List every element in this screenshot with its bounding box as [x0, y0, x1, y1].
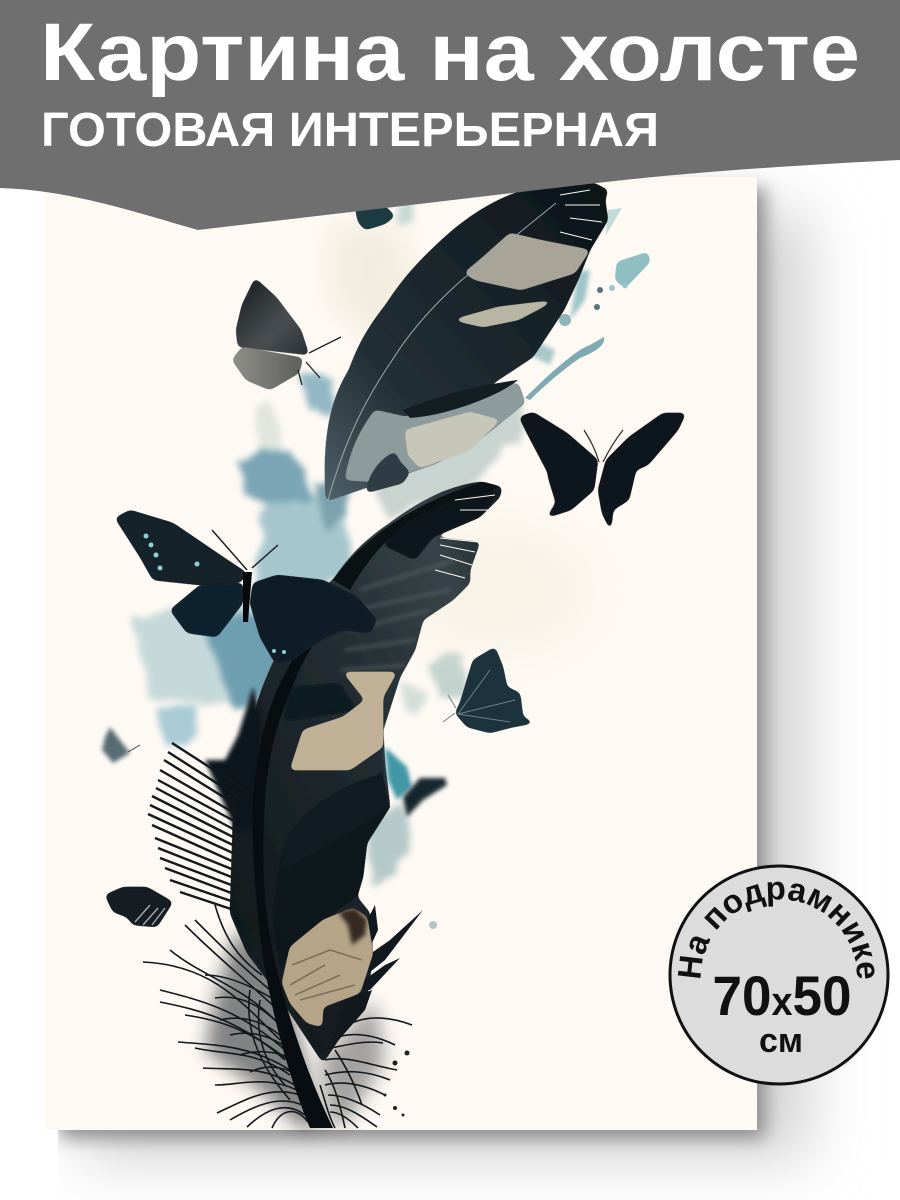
- upper left butterfly lower wing: [232, 347, 303, 390]
- teal butterfly dark wing: [403, 778, 447, 817]
- upper feather: [325, 183, 608, 500]
- tan feather streaks: [290, 950, 362, 1000]
- feather quill: [253, 615, 333, 1128]
- centre butterfly body: [243, 572, 252, 622]
- lower feather tip fringe: [435, 495, 495, 578]
- centre butterfly spots: [144, 534, 286, 654]
- tan feather dark spot: [338, 908, 367, 945]
- lower feather tan patch: [290, 672, 397, 770]
- canvas shadow: [0, 170, 810, 1200]
- centre butterfly antennae: [212, 530, 278, 570]
- butterfly: lower left: [105, 887, 173, 927]
- lower feather tip fill: [383, 490, 500, 560]
- centre butterfly lower left wing: [170, 583, 243, 637]
- upper feather tip fringe: [560, 190, 602, 240]
- badge arc text: На подрамнике: [678, 882, 874, 978]
- upper feather cream wash: [405, 412, 500, 468]
- upper feather light patch lower: [452, 300, 556, 327]
- butterfly: large centre: [115, 510, 377, 663]
- small left butterfly antenna: [128, 745, 140, 752]
- feather down: [143, 905, 412, 1128]
- upper feather shaft: [328, 203, 556, 500]
- upper feather pale base: [345, 383, 525, 482]
- lower left butterfly stripes: [135, 905, 165, 925]
- painting canvas: [45, 177, 757, 1130]
- badge unit: см: [759, 1022, 803, 1060]
- tan feather: [282, 908, 373, 1027]
- butterfly: upper left: [232, 278, 341, 390]
- lower feather overlay top: [283, 773, 390, 870]
- butterfly: top small: [355, 206, 395, 230]
- upper left butterfly top wing: [236, 278, 309, 355]
- right spikes: [330, 905, 423, 1050]
- badge size: 70x50: [712, 964, 852, 1027]
- left vane spike: [205, 687, 262, 830]
- title: Картина на холсте: [40, 7, 860, 98]
- upper feather dark streak: [403, 380, 518, 418]
- centre butterfly upper left wing: [115, 510, 247, 585]
- right-of-feather butterfly veins: [443, 670, 515, 722]
- lower feather dark band: [283, 683, 357, 722]
- lower feather: [205, 482, 502, 1063]
- right butterfly antenna: [584, 430, 623, 462]
- header banner: [0, 0, 900, 230]
- feather down dark core: [205, 930, 385, 1128]
- butterfly: right: [519, 412, 686, 532]
- feather barbs striped: [148, 743, 245, 910]
- lower feather dark overlay: [272, 807, 390, 970]
- centre butterfly right wing: [250, 575, 377, 663]
- subtitle: ГОТОВАЯ ИНТЕРЬЕРНАЯ: [41, 104, 659, 157]
- upper feather light patch: [464, 233, 590, 290]
- butterfly: right of feather: [443, 647, 535, 733]
- lower feather upper edge: [333, 482, 500, 590]
- watercolor washes: [130, 203, 650, 1116]
- butterfly: small left: [102, 727, 140, 763]
- butterfly: teal: [385, 747, 447, 817]
- size badge: [668, 864, 890, 1086]
- lower feather grey streaks: [340, 560, 455, 670]
- upper left butterfly antenna: [298, 337, 341, 385]
- butterfly: small on feather: [366, 452, 410, 493]
